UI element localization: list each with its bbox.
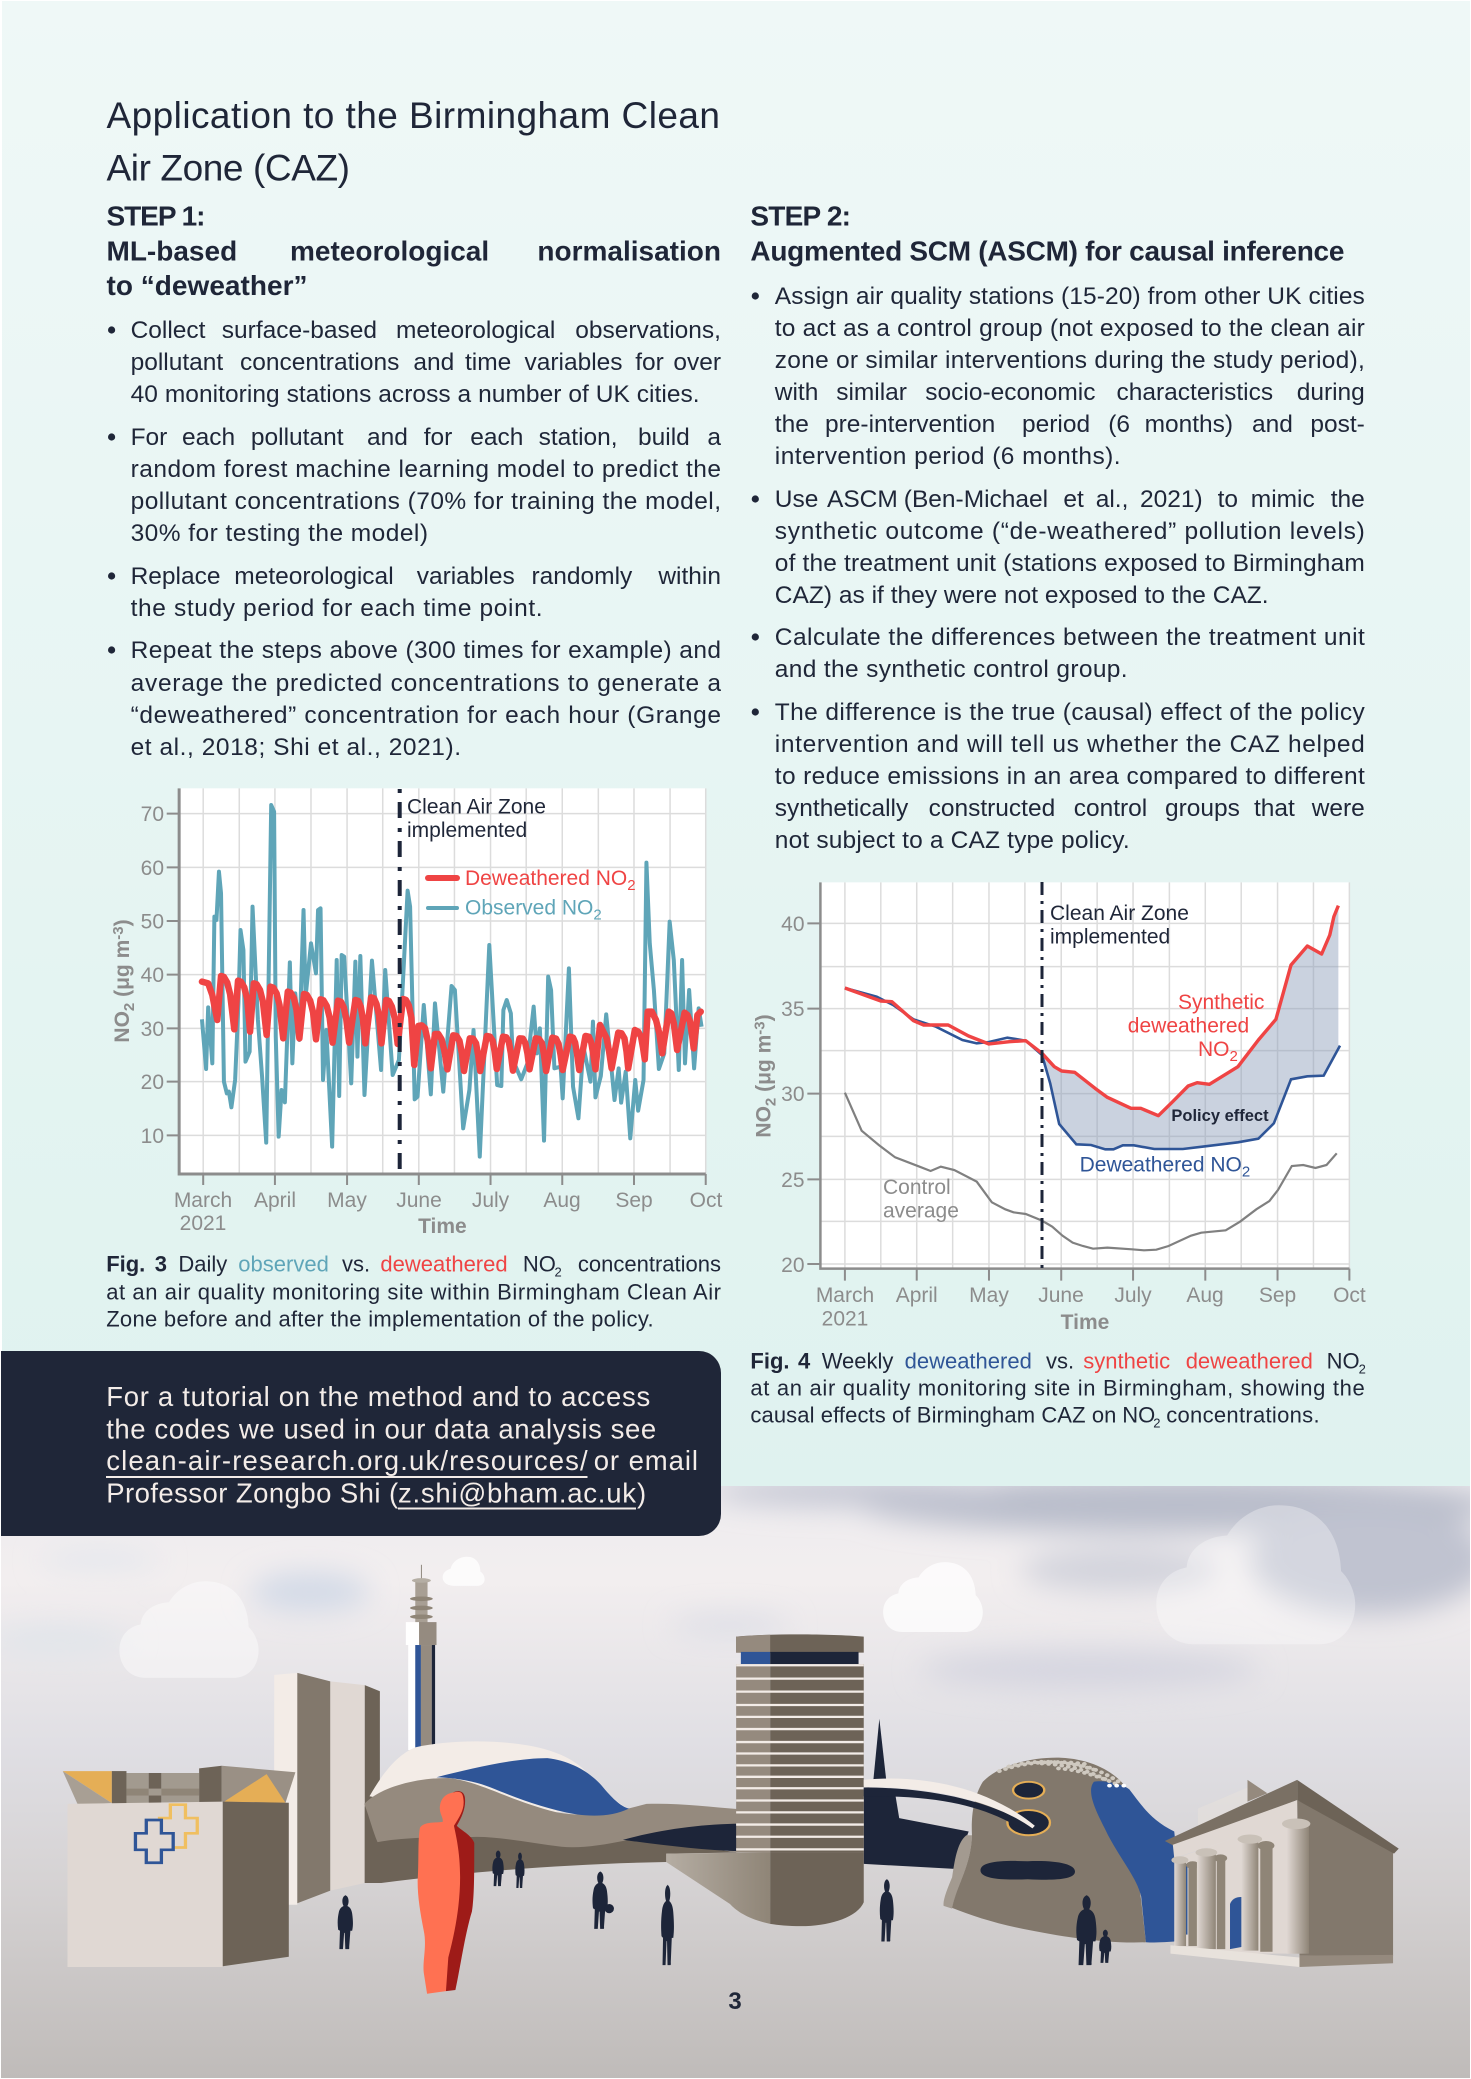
text block: step 1 bullets: pollutant concentrations (70% for training the model,	[131, 488, 721, 515]
background: mint page	[2, 1, 1470, 1487]
label: synthetic deweathered NO2: deweathered	[1128, 1014, 1249, 1037]
text block: step 1 bullets: et al., 2018; Shi et al., 2021).	[131, 734, 461, 761]
caption: figure 4: at an air quality monitoring site in Birmingham, showing the	[750, 1376, 1365, 1401]
area: policy effect	[1042, 906, 1338, 1149]
text block: step 1 bullets: and	[413, 349, 454, 376]
y axis labels: 10	[141, 1125, 164, 1148]
x axis labels: 2021	[180, 1212, 226, 1235]
annotation: clean air zone	[1050, 902, 1189, 948]
x axis labels: Aug	[1186, 1284, 1224, 1307]
text block: step 1 bullets: “deweathered” concentration for each hour (Grange	[131, 702, 721, 729]
label: control average: average	[883, 1200, 959, 1223]
caption: figure 3: Zone before and after the implementation of the policy.	[106, 1307, 654, 1332]
callout: tutorial and contact	[1, 1351, 721, 1536]
text block: step 1 bullets: For	[131, 424, 167, 451]
building: BT tower	[406, 1565, 437, 1750]
y axis labels: 25	[781, 1169, 804, 1192]
callout: tutorial and contact: Professor Zongbo Shi (	[106, 1477, 398, 1508]
y axis title: NO	[752, 1106, 776, 1138]
text block: step 2 bullets	[752, 283, 1366, 854]
building: hospital	[63, 1766, 295, 1967]
icon: cloud small	[443, 1557, 485, 1586]
title: Air Zone (CAZ)	[106, 148, 350, 188]
text block: step 2 bullets: constructed	[929, 795, 1055, 822]
y axis labels: 20	[141, 1071, 164, 1094]
annotation: clean air zone	[407, 796, 546, 842]
text block: step 2 bullets: 2021)	[1140, 486, 1203, 513]
x axis labels: Oct	[690, 1189, 722, 1212]
text block: step 2 bullets: to reduce emissions in an area compared to different	[775, 763, 1365, 790]
building: town hall temple	[1165, 1780, 1399, 1967]
text block: step 2 bullets: The difference is the true (causal) effect of the policy	[775, 699, 1366, 726]
text block: step 1 bullets: station,	[539, 424, 618, 451]
text block: step 2 bullets: al.,	[1096, 486, 1128, 513]
illustration: left half of skyline	[63, 1557, 740, 1994]
axes	[179, 788, 706, 1174]
person: silhouette	[338, 1895, 353, 1949]
x axis labels	[816, 1284, 1366, 1331]
person: adult silhouette	[1076, 1895, 1096, 1965]
heading: step 1: normalisation	[537, 236, 721, 266]
text block: step 1 bullets: each	[182, 424, 235, 451]
building: rotunda	[666, 1634, 864, 1926]
caption: figure 3	[106, 1252, 721, 1332]
text block: step 2 bullets: Assign air quality stations (15-20) from other UK cities	[775, 283, 1365, 310]
text block: step 2 bullets: (Ben-Michael	[904, 486, 1048, 513]
chart: weekly deweathered vs synthetic NO2	[752, 882, 1366, 1334]
label: synthetic deweathered NO2: Synthetic	[1178, 991, 1264, 1014]
y axis title: )	[111, 919, 134, 926]
caption: figure 3: 2	[554, 1265, 562, 1280]
title: Application to the Birmingham Clean	[106, 95, 720, 136]
caption: figure 3: vs.	[342, 1252, 370, 1277]
x axis labels: April	[896, 1284, 938, 1307]
caption: figure 4: 4	[798, 1348, 811, 1373]
caption: figure 4: Weekly	[822, 1348, 893, 1373]
x axis labels: March	[174, 1189, 232, 1212]
text block: step 1 bullets: 30% for testing the model)	[131, 520, 428, 547]
text block: step 1 bullets: average the predicted concentrations to generate a	[131, 670, 721, 697]
text block: step 1 bullets: variables	[524, 349, 623, 376]
background: sky and ground	[0, 1477, 1471, 2078]
heading: step 1	[106, 200, 721, 301]
text block: step 2 bullets: intervention period (6 months).	[775, 443, 1121, 470]
x axis labels: June	[396, 1189, 442, 1212]
legend: 2	[627, 877, 636, 894]
text block: step 2 bullets: and	[1252, 411, 1293, 438]
text block: step 2 bullets: groups	[1165, 795, 1240, 822]
caption: figure 4: 2	[1359, 1361, 1366, 1376]
y axis labels: 70	[141, 803, 164, 826]
text block: step 2 bullets: synthetically	[775, 795, 909, 822]
x axis labels: July	[472, 1189, 510, 1212]
y axis title: 2	[762, 1098, 780, 1106]
x axis labels: March	[816, 1284, 874, 1307]
text block: step 2 bullets: were	[1311, 795, 1365, 822]
x axis labels: Aug	[543, 1189, 581, 1212]
x axis title: Time	[1061, 1311, 1109, 1334]
icon: blue cross	[135, 1820, 173, 1863]
x axis labels: Sep	[615, 1189, 653, 1212]
heading: step 1: STEP 1:	[106, 200, 206, 232]
legend	[428, 867, 636, 924]
callout: tutorial and contact: z.shi@bham.ac.uk	[398, 1477, 636, 1508]
x axis labels: June	[1038, 1284, 1084, 1307]
text block: step 2 bullets: (6	[1108, 411, 1130, 438]
y axis labels: 50	[141, 910, 164, 934]
text block: step 1 bullets: randomly	[532, 563, 633, 590]
line: observed NO2	[202, 805, 702, 1157]
line: deweathered NO2	[845, 988, 1340, 1149]
label: synthetic deweathered NO2: 2	[1230, 1048, 1238, 1065]
heading: step 2: Augmented SCM (ASCM) for causal inference	[750, 236, 1344, 266]
text block: step 1 bullets: surface-based	[222, 317, 377, 344]
illustration: right half of skyline	[666, 1505, 1399, 1967]
y axis title: NO	[111, 1011, 134, 1043]
person: silhouette	[492, 1851, 504, 1886]
text block: step 1 bullets	[108, 317, 721, 761]
text block: step 1 bullets: and	[367, 424, 408, 451]
person: walking silhouette	[880, 1879, 894, 1941]
text block: step 1 bullets: Collect	[131, 317, 206, 344]
x axis title: Time	[418, 1215, 467, 1238]
text block: step 2 bullets: socio-economic	[925, 379, 1096, 406]
y axis labels: 30	[781, 1083, 804, 1106]
text block: step 1 bullets: each	[470, 424, 523, 451]
text block: step 1 bullets: for	[635, 349, 664, 376]
label: deweathered NO2: 2	[1242, 1164, 1250, 1181]
text block: step 1 bullets: pollutant	[131, 349, 223, 376]
y axis labels	[141, 803, 164, 1148]
text block: step 1 bullets: 40 monitoring stations across a number of UK cities.	[131, 381, 700, 408]
caption: figure 3: Fig.	[106, 1252, 145, 1277]
text block: step 1 bullets: a	[707, 424, 721, 451]
text block: step 2 bullets: similar	[836, 379, 907, 406]
x axis labels: May	[969, 1284, 1009, 1307]
caption: figure 4: deweathered	[1186, 1348, 1313, 1373]
label: control average: Control	[883, 1176, 951, 1199]
heading: step 2	[750, 200, 1344, 266]
text block: step 1 bullets: meteorological	[396, 317, 555, 344]
caption: figure 3: observed	[238, 1252, 329, 1277]
heading: step 1: meteorological	[290, 236, 489, 266]
label: deweathered NO2: Deweathered NO	[1080, 1154, 1242, 1177]
x axis labels	[174, 1189, 722, 1235]
text block: step 2 bullets: period	[1022, 411, 1090, 438]
text block: step 1 bullets: pollutant	[251, 424, 344, 451]
caption: figure 4: vs.	[1046, 1348, 1074, 1373]
text block: step 2 bullets: characteristics	[1116, 379, 1273, 406]
text block: step 2 bullets: synthetic outcome (“de-weathered” pollution levels)	[775, 518, 1365, 545]
line: control average	[845, 1093, 1337, 1250]
y axis labels: 40	[141, 964, 164, 987]
y axis title: -3	[752, 1021, 768, 1035]
text block: step 1 bullets: Replace	[131, 563, 220, 590]
x axis labels: 2021	[822, 1308, 868, 1331]
caption: figure 3: 3	[155, 1252, 167, 1277]
y axis title: (μg m	[111, 940, 134, 1003]
chart: daily observed vs deweathered NO2	[110, 788, 722, 1238]
heading: step 2: STEP 2:	[750, 200, 851, 232]
person: statue orange	[418, 1791, 474, 1994]
annotation: clean air zone: implemented	[407, 819, 527, 842]
text block: step 2 bullets: that	[1254, 795, 1295, 822]
text block: step 2 bullets: to	[1218, 486, 1238, 513]
heading: step 1: to “deweather”	[106, 270, 308, 301]
line: CAZ implementation marker	[1040, 882, 1044, 1268]
person: silhouette	[515, 1852, 525, 1888]
text block: step 2 bullets: pre-intervention	[825, 411, 995, 438]
annotation: clean air zone: Clean Air Zone	[1050, 902, 1189, 925]
text block: step 2 bullets: ASCM	[827, 486, 898, 513]
callout: tutorial and contact: clean-air-research.org.uk/resources/	[106, 1445, 588, 1476]
caption: figure 3: deweathered	[380, 1252, 508, 1277]
text block: step 1 bullets: observations,	[575, 317, 721, 344]
caption: figure 3: concentrations	[578, 1252, 721, 1277]
y axis title: -3	[110, 926, 127, 940]
line: CAZ implementation marker	[398, 788, 402, 1174]
person: child silhouette	[1099, 1930, 1111, 1963]
annotation: clean air zone: implemented	[1050, 925, 1170, 948]
text block: step 2 bullets: control	[1074, 795, 1147, 822]
caption: figure 4: Fig.	[750, 1348, 790, 1373]
legend: 2	[593, 906, 602, 924]
label: control average	[883, 1176, 959, 1223]
callout: tutorial and contact: )	[637, 1477, 646, 1508]
callout: tutorial and contact: or email	[594, 1445, 698, 1476]
text block: step 2 bullets: months)	[1145, 411, 1233, 438]
text block: step 1 bullets: random forest machine learning model to predict the	[131, 456, 721, 483]
callout: tutorial and contact: For a tutorial on the method and to access	[106, 1381, 650, 1412]
text block: step 2 bullets: intervention and will tell us whether the CAZ helped	[775, 731, 1365, 758]
text block: step 1 bullets: meteorological	[234, 563, 394, 590]
y axis title: )	[752, 1014, 776, 1021]
page number: 3	[728, 1988, 742, 2015]
heading: step 1: ML-based	[106, 236, 237, 266]
text block: step 2 bullets: Calculate the differences between the treatment unit	[775, 624, 1365, 651]
x axis labels: April	[254, 1189, 296, 1212]
text block: step 2 bullets: not subject to a CAZ type policy.	[775, 827, 1130, 854]
x axis labels: Sep	[1259, 1284, 1296, 1307]
text block: step 1 bullets: time	[465, 349, 511, 376]
icon: cloud middle	[883, 1562, 983, 1632]
label: policy effect: Policy effect	[1171, 1107, 1269, 1125]
caption: figure 4: deweathered	[905, 1348, 1032, 1373]
caption: figure 4: causal effects of Birmingham CAZ on	[750, 1403, 1116, 1428]
building: library swoosh	[364, 1741, 740, 1883]
caption: figure 3: at an air quality monitoring site within Birmingham Clean Air	[106, 1279, 721, 1304]
y axis labels: 20	[781, 1254, 804, 1277]
text block: step 2 bullets: Use	[775, 486, 818, 513]
building: spire and navy block	[864, 1719, 969, 1869]
x axis labels: May	[327, 1189, 367, 1212]
text block: step 1 bullets: concentrations	[240, 349, 399, 376]
text block: step 1 bullets: for	[424, 424, 452, 451]
text block: step 1 bullets: over	[673, 349, 721, 376]
annotation: clean air zone: Clean Air Zone	[407, 796, 546, 818]
axes	[820, 882, 1349, 1269]
label: synthetic deweathered NO2: NO	[1198, 1038, 1230, 1061]
building: selfridges	[864, 1758, 1186, 1943]
y axis title: (μg m	[752, 1035, 776, 1098]
text block: step 1 bullets: Repeat the steps above (300 times for example) and	[131, 637, 721, 664]
title	[106, 95, 720, 188]
text block: step 2 bullets: mimic	[1251, 486, 1315, 513]
text block: step 2 bullets: to act as a control group (not exposed to the clean air	[775, 315, 1365, 342]
caption: figure 3: Daily	[178, 1252, 227, 1277]
text block: step 2 bullets: post-	[1310, 411, 1365, 438]
y axis labels: 60	[141, 857, 164, 880]
caption: figure 4	[750, 1348, 1366, 1431]
icon: cloud large right	[1156, 1505, 1355, 1644]
y axis labels: 30	[141, 1018, 164, 1041]
x axis labels: July	[1114, 1284, 1152, 1307]
line: deweathered NO2	[202, 976, 701, 1071]
text block: step 1 bullets: build	[638, 424, 690, 451]
text block: step 2 bullets: CAZ) as if they were not exposed to the CAZ.	[775, 582, 1269, 609]
label: synthetic deweathered NO2	[1128, 991, 1264, 1065]
caption: figure 4: NO	[1327, 1348, 1360, 1373]
y axis labels: 40	[781, 913, 804, 936]
legend: Deweathered NO	[465, 867, 627, 890]
text block: step 1 bullets: within	[657, 563, 721, 590]
y axis title: 2	[121, 1003, 138, 1011]
caption: figure 4: 2	[1153, 1416, 1161, 1431]
text block: step 1 bullets: the study period for each time point.	[131, 595, 543, 622]
person: silhouette	[661, 1885, 674, 1965]
caption: figure 3: NO	[523, 1252, 556, 1277]
y axis labels: 35	[781, 998, 804, 1021]
text block: step 2 bullets: and the synthetic control group.	[775, 656, 1128, 683]
icon: yellow cross	[160, 1805, 197, 1847]
x axis labels: Oct	[1333, 1284, 1366, 1307]
person: silhouette with bag	[592, 1872, 614, 1929]
building: tower block	[274, 1673, 380, 1905]
caption: figure 4: synthetic	[1083, 1348, 1170, 1373]
text block: step 1 bullets: variables	[417, 563, 515, 590]
y axis labels	[781, 913, 804, 1277]
icon: cloud large left	[119, 1581, 259, 1678]
text block: step 2 bullets: of the treatment unit (stations exposed to Birmingham	[775, 550, 1365, 577]
text block: step 2 bullets: during	[1297, 379, 1365, 406]
line: synthetic deweathered NO2	[845, 906, 1338, 1116]
caption: figure 4: NO	[1122, 1403, 1155, 1428]
text block: step 2 bullets: with	[774, 379, 818, 406]
caption: figure 4: concentrations.	[1166, 1403, 1320, 1428]
text block: step 2 bullets: zone or similar interventions during the study period),	[775, 347, 1365, 374]
callout: tutorial and contact: the codes we used in our data analysis see	[106, 1413, 656, 1444]
text block: step 2 bullets: the	[1331, 486, 1365, 513]
text block: step 2 bullets: et	[1063, 486, 1084, 513]
text block: step 2 bullets: the	[775, 411, 809, 438]
legend: Observed NO	[465, 896, 593, 920]
